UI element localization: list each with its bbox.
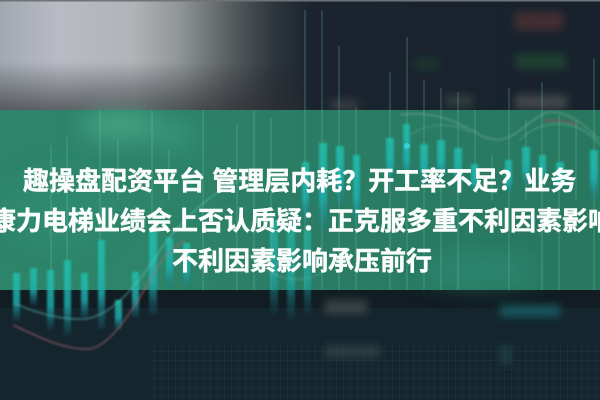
bottom dark region [0, 288, 600, 400]
trend curves [13, 112, 600, 349]
faint wicks above and across the band [51, 10, 594, 290]
headline [0, 166, 600, 276]
glowing data point [404, 143, 410, 149]
top photo region [0, 0, 600, 112]
candlesticks [13, 124, 598, 336]
blurred dark-side chart labels [330, 12, 567, 110]
headline line 3: 不利因素影响承压前行 [172, 246, 432, 276]
green band [0, 110, 600, 290]
headline line 1: 趣操盘配资平台 管理层内耗？开工率不足？业务 [23, 166, 576, 196]
